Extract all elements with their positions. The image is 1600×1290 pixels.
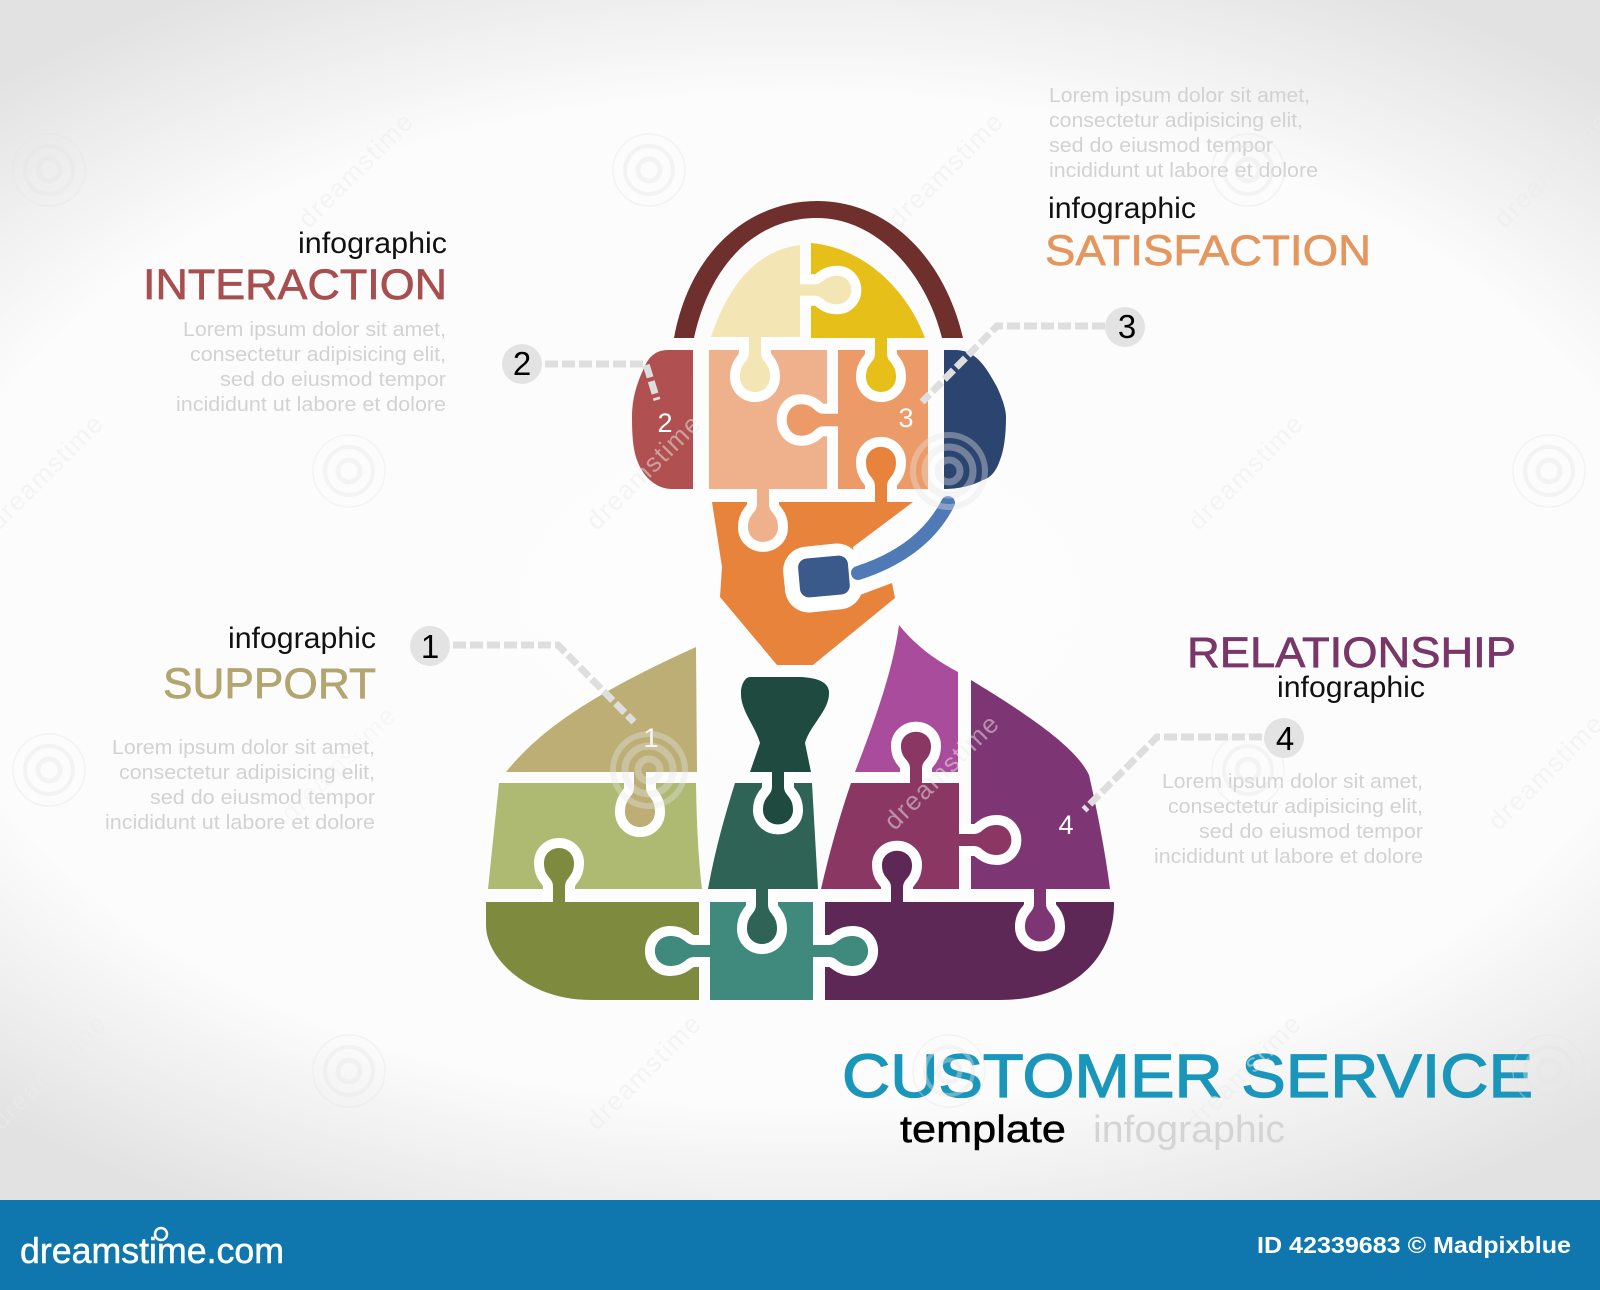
microphone surround xyxy=(781,541,865,615)
puzzle tab: tie into teal xyxy=(747,889,777,944)
footer credit: ID 42339683 © Madpixblue xyxy=(1257,1232,1571,1258)
marker 3 xyxy=(1105,307,1145,347)
microphone arm xyxy=(858,503,948,573)
text block: relationship: consectetur adipisicing elit, xyxy=(1168,796,1423,818)
puzzle tab: cream into yellow xyxy=(800,276,851,304)
puzzle tab: tie knot into tie xyxy=(763,772,793,824)
watermark text: dreamstime xyxy=(882,106,1010,234)
text block: interaction: consectetur adipisicing elit, xyxy=(190,344,446,366)
text block: satisfaction: SATISFACTION xyxy=(1045,227,1371,275)
text block: interaction: incididunt ut labore et dolore xyxy=(176,394,446,416)
puzzle tab: olive into green xyxy=(544,848,574,902)
body piece: light purple xyxy=(855,625,958,772)
watermark text: dreamstime xyxy=(275,700,403,828)
text block: interaction: Lorem ipsum dolor sit amet, xyxy=(183,319,446,341)
subtitle: template: template xyxy=(900,1109,1066,1151)
body piece: purple xyxy=(971,680,1110,889)
text block: satisfaction: incididunt ut labore et dolore xyxy=(1049,160,1318,182)
marker 2: 2 xyxy=(513,345,531,382)
text block: relationship: incididunt ut labore et dolore xyxy=(1154,846,1423,868)
connector 2 xyxy=(545,364,657,400)
text block: support: incididunt ut labore et dolore xyxy=(105,812,375,834)
figure number 4: 4 xyxy=(1058,810,1074,840)
puzzle tab: tan into green xyxy=(625,772,655,827)
footer bar xyxy=(0,1200,1600,1290)
connector 1 xyxy=(453,645,634,722)
text block: support: consectetur adipisicing elit, xyxy=(119,762,375,784)
text block: support: Lorem ipsum dolor sit amet, xyxy=(112,737,375,759)
face piece: light peach xyxy=(709,350,827,489)
puzzle tab: mid peach into light peach xyxy=(787,404,838,436)
watermark text xyxy=(0,106,1600,1136)
text block: interaction xyxy=(143,227,447,416)
body piece: teal xyxy=(710,902,813,1000)
puzzle tab: maroon into light purple xyxy=(901,732,931,783)
text block: relationship: RELATIONSHIP xyxy=(1187,629,1516,677)
text block: satisfaction: consectetur adipisicing elit, xyxy=(1049,110,1303,132)
puzzle tab: dark purple into maroon xyxy=(882,851,912,902)
right ear cup xyxy=(944,350,1006,489)
text block: satisfaction: Lorem ipsum dolor sit amet, xyxy=(1049,85,1310,107)
footer logo: dreamstime.com xyxy=(20,1230,284,1271)
left ear cup xyxy=(632,350,693,489)
watermark text: dreamstime xyxy=(878,708,1006,836)
face piece: mid peach xyxy=(838,350,928,489)
connector 3 xyxy=(922,326,1105,402)
text block: relationship: infographic xyxy=(1277,671,1425,704)
puzzle tab: maroon into purple xyxy=(959,825,1011,855)
watermark spirals xyxy=(13,134,1585,1107)
puzzle tab: yellow into peach xyxy=(866,338,896,392)
text block: interaction: infographic xyxy=(298,227,447,260)
body piece: olive xyxy=(486,902,699,1000)
text block: satisfaction: sed do eiusmod tempor xyxy=(1049,135,1273,157)
puzzle tab: teal into dark purple xyxy=(813,936,868,966)
tie knot xyxy=(741,677,829,772)
microphone xyxy=(797,555,851,598)
figure number 3: 3 xyxy=(898,403,914,433)
text block: support: SUPPORT xyxy=(163,660,376,708)
text block: satisfaction: infographic xyxy=(1048,192,1196,225)
puzzle tab: cream into peach xyxy=(740,337,770,392)
figure number 1: 1 xyxy=(643,723,659,753)
head piece: cream xyxy=(711,245,800,337)
text block: support: sed do eiusmod tempor xyxy=(150,787,375,809)
watermark text: dreamstime xyxy=(1182,408,1310,536)
chin piece: orange xyxy=(712,502,913,665)
marker 1 xyxy=(410,626,450,666)
puzzle tab: orange into mid peach xyxy=(866,447,896,502)
text block: relationship xyxy=(1154,629,1516,868)
text block: interaction: INTERACTION xyxy=(143,261,447,309)
body piece: tan xyxy=(506,647,697,772)
marker 3: 3 xyxy=(1118,308,1136,345)
text block: support: infographic xyxy=(228,622,376,655)
marker 2 xyxy=(502,344,542,384)
watermark text: dreamstime xyxy=(580,1008,708,1136)
puzzle tab: purple into dark purple xyxy=(1025,889,1055,941)
marker 4: 4 xyxy=(1276,720,1294,757)
body piece: dark purple xyxy=(825,902,1114,1000)
text block: interaction: sed do eiusmod tempor xyxy=(220,369,446,391)
figure: customer service agent made of puzzle pieces xyxy=(486,201,1114,1000)
puzzle tab: light peach into orange xyxy=(748,489,778,542)
subtitle: infographic: infographic xyxy=(1093,1109,1285,1151)
body piece: light green xyxy=(488,783,702,889)
puzzle tab: teal into olive xyxy=(655,936,710,966)
body piece: maroon xyxy=(821,783,959,889)
watermark text: dreamstime xyxy=(1180,1008,1308,1136)
text block: relationship: sed do eiusmod tempor xyxy=(1199,821,1423,843)
watermark text: dreamstime xyxy=(580,408,708,536)
text block: relationship: Lorem ipsum dolor sit amet, xyxy=(1162,771,1423,793)
figure number 2: 2 xyxy=(657,408,673,438)
marker 1: 1 xyxy=(421,628,439,665)
text block: satisfaction xyxy=(1045,85,1371,275)
tie lower xyxy=(708,783,818,889)
head piece: yellow xyxy=(811,243,925,338)
headband xyxy=(674,201,963,338)
connector 4 xyxy=(1084,737,1262,810)
watermark text: dreamstime xyxy=(292,106,420,234)
marker 4 xyxy=(1264,718,1304,758)
text block: support xyxy=(105,622,376,834)
title: CUSTOMER SERVICE xyxy=(842,1042,1533,1110)
